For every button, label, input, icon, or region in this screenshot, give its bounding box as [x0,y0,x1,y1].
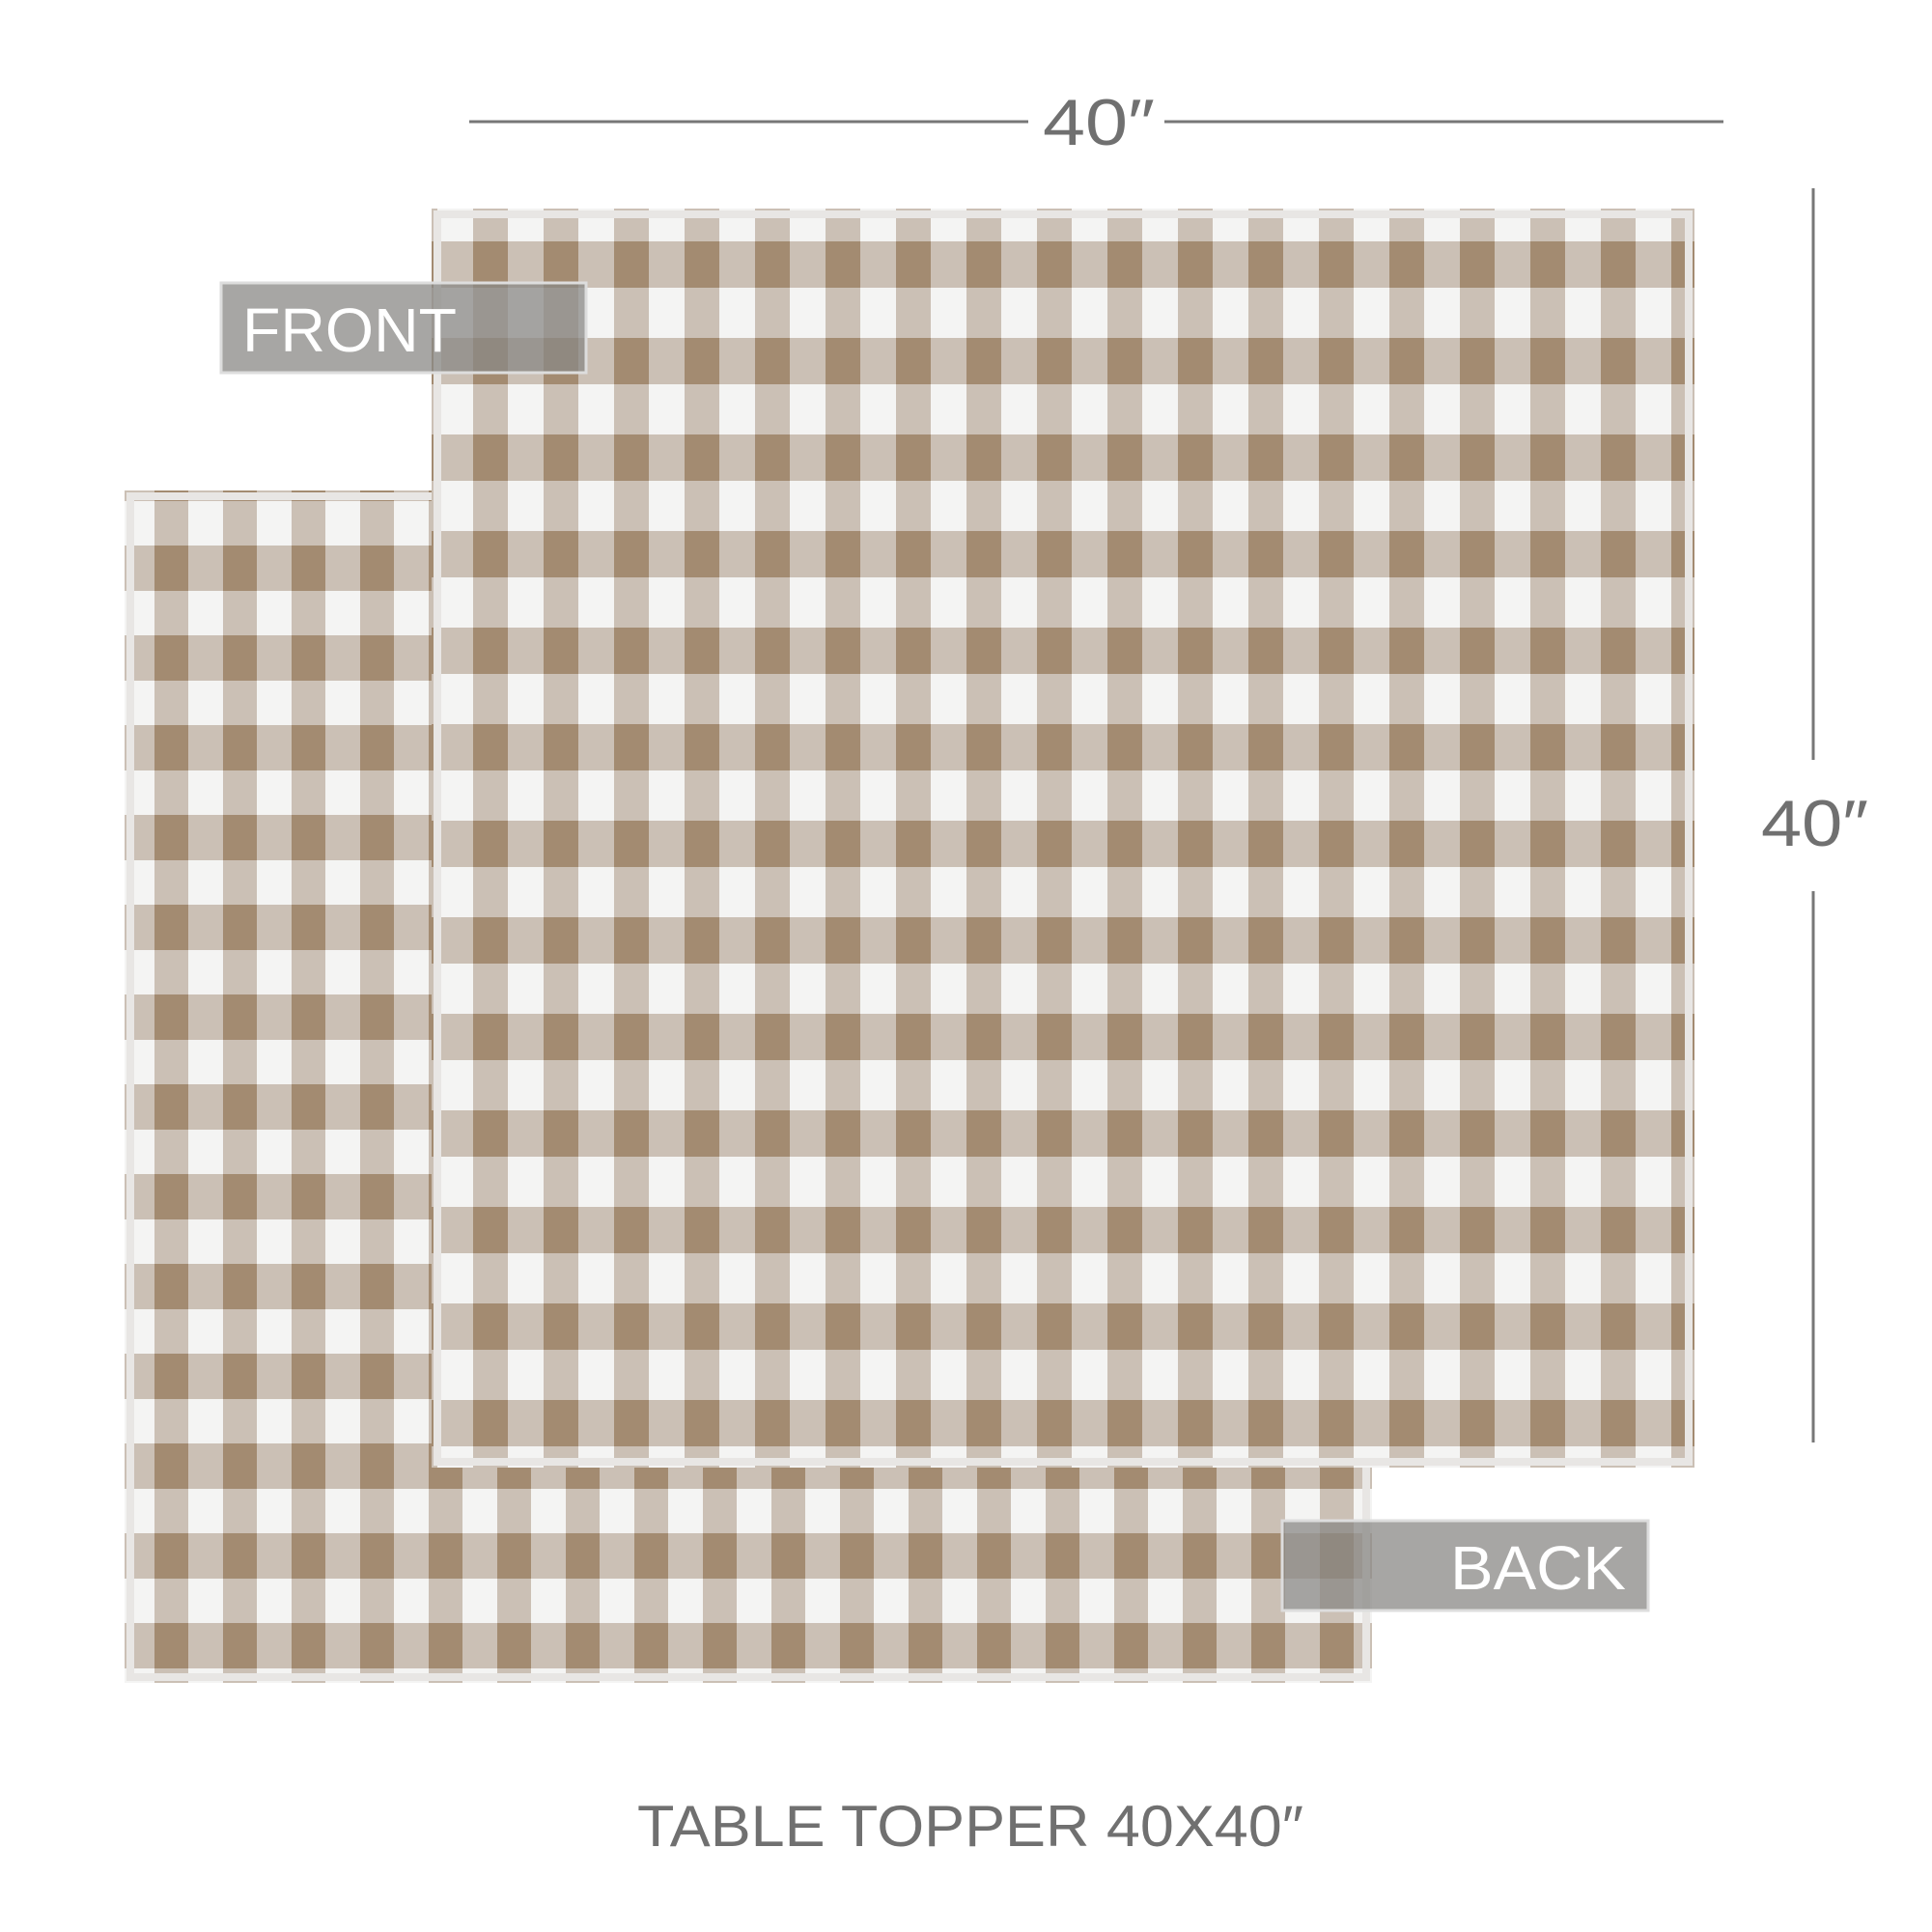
label: back: BACK [1450,1533,1626,1603]
height dimension: 40″ [1761,787,1868,860]
caption: TABLE TOPPER 40X40″ [637,1794,1303,1859]
front cloth [432,209,1694,1468]
label: front [221,283,586,373]
back cloth [125,490,1372,1683]
label: back [1282,1521,1648,1610]
width dimension: 40″ [1043,86,1155,159]
label: front: FRONT [242,295,457,365]
